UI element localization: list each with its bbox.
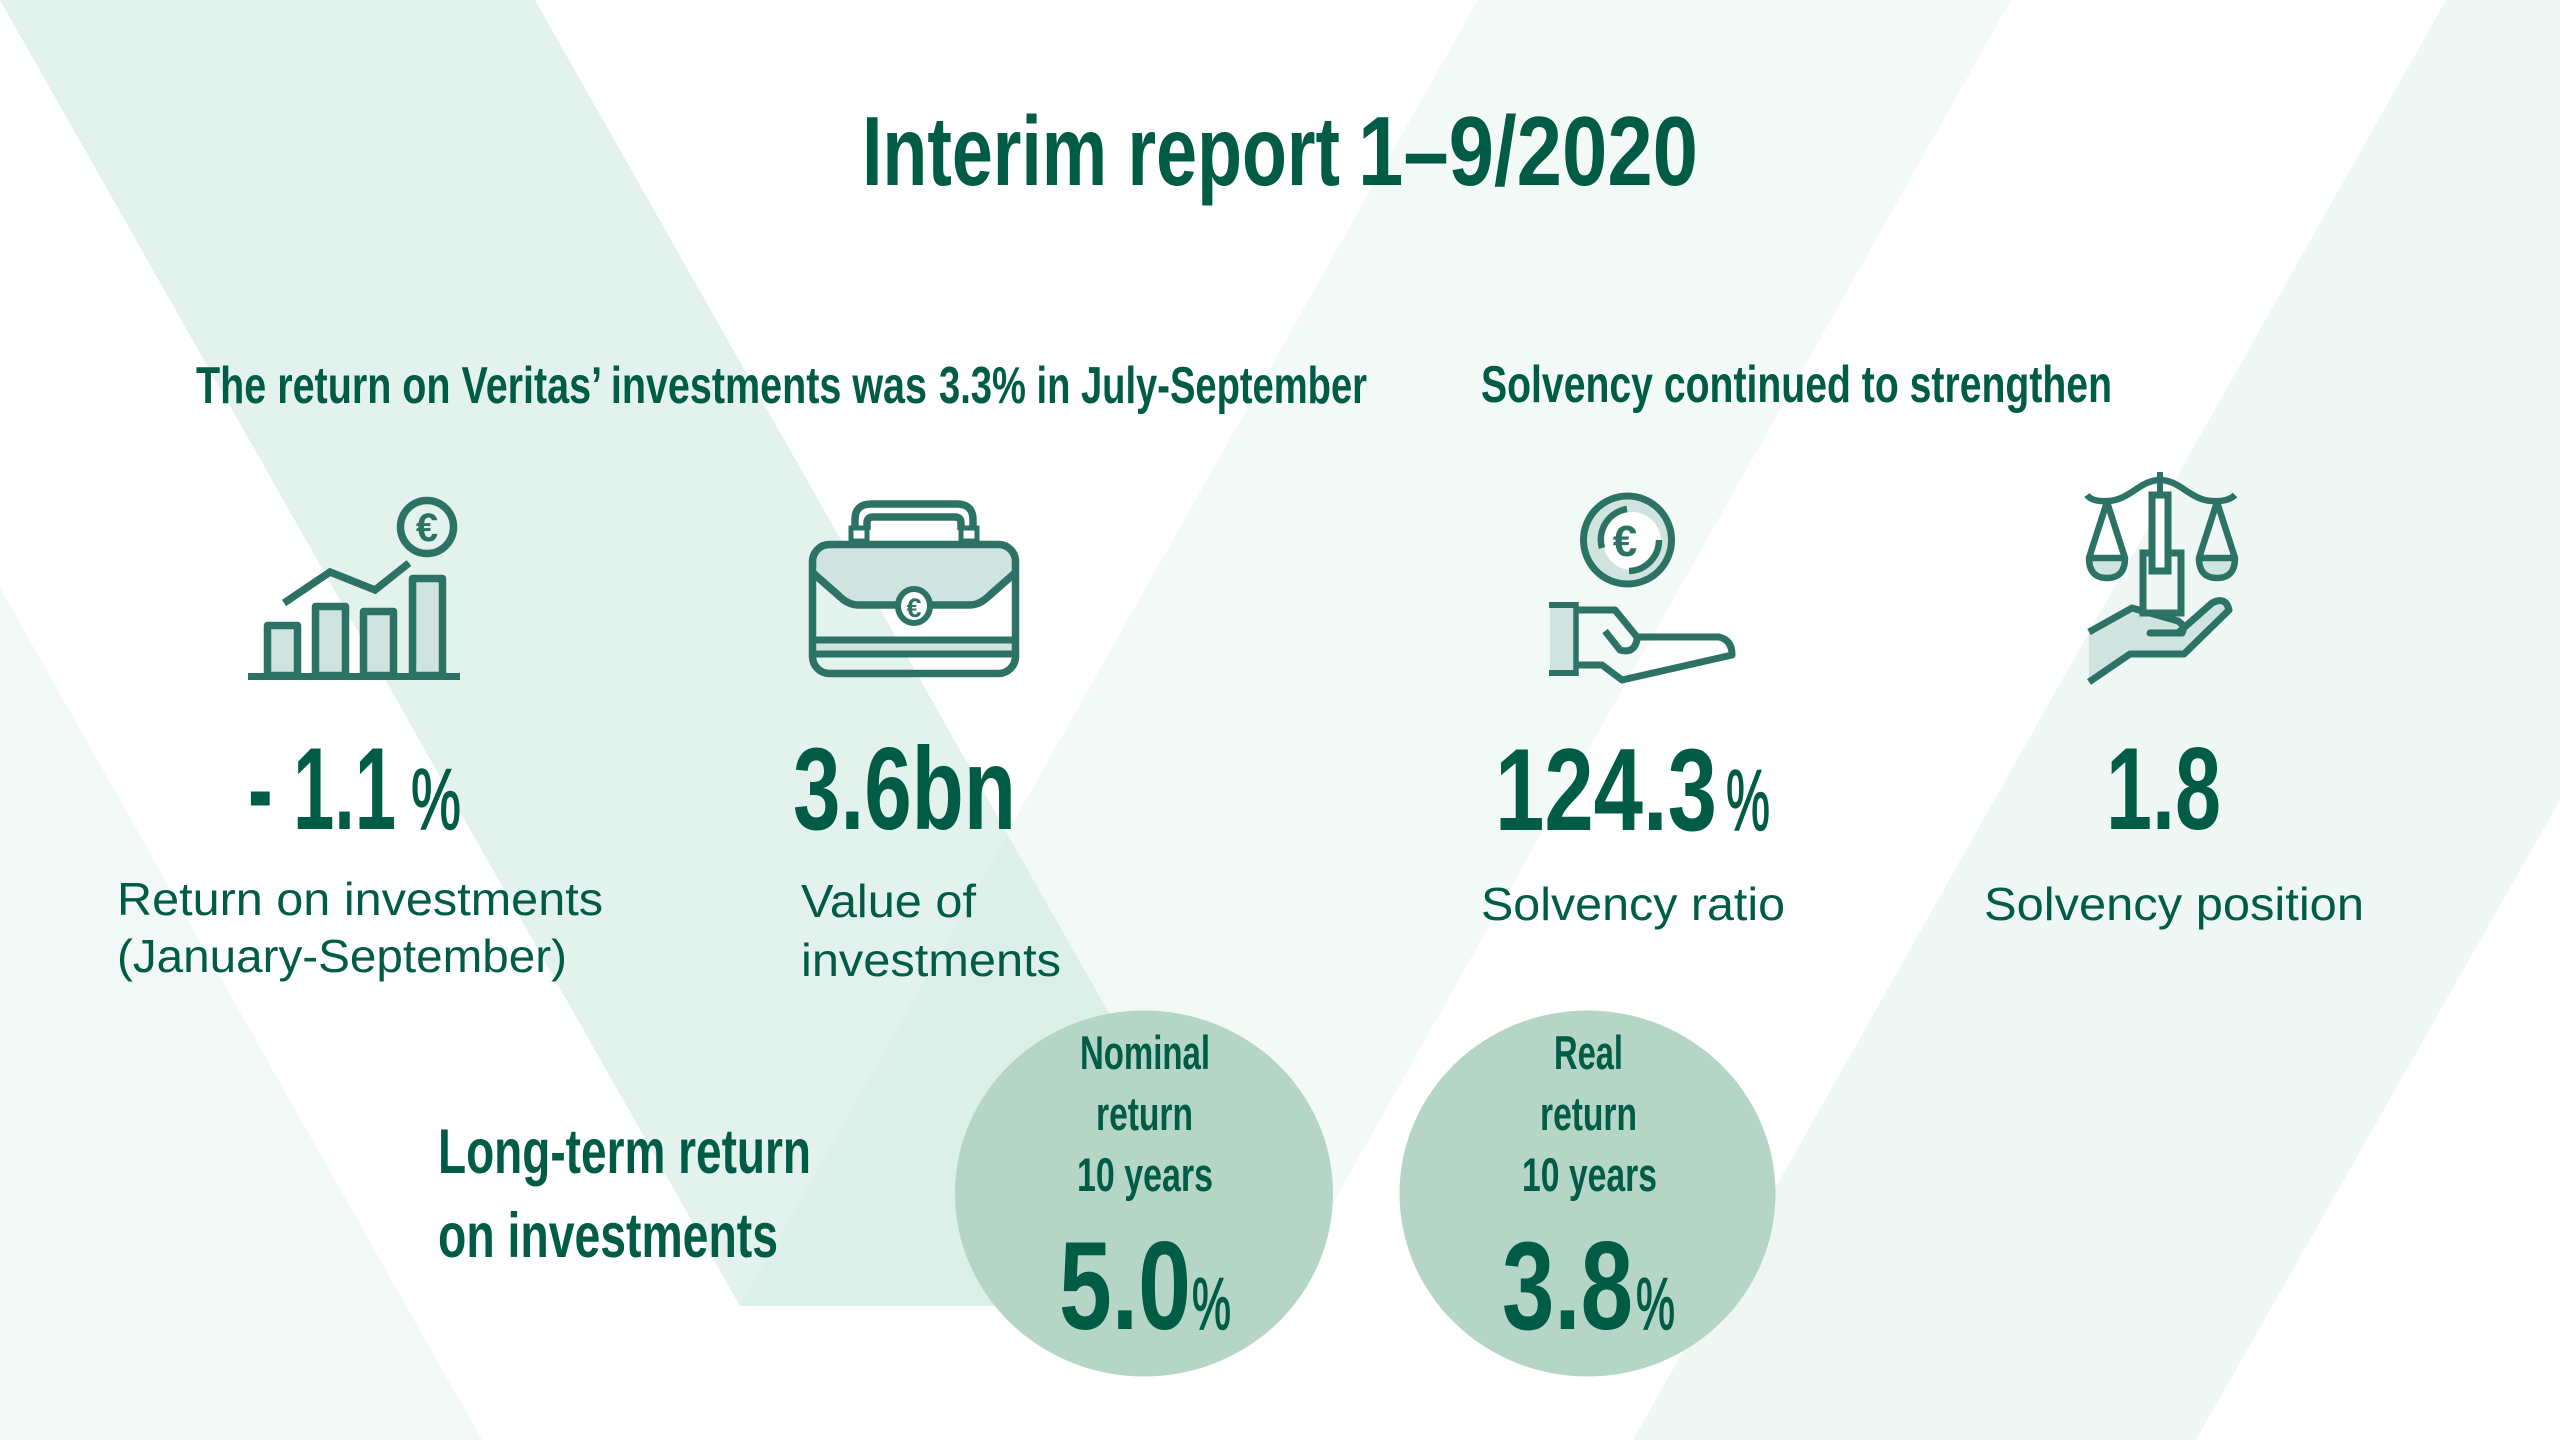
circle: nominal return: % bbox=[1192, 1264, 1231, 1345]
metric: solvency position bbox=[1984, 723, 2364, 930]
icon: hand holding scales bbox=[2087, 472, 2235, 682]
metric: solvency ratio bbox=[1481, 724, 1785, 930]
icon: briefcase: € bbox=[906, 593, 922, 623]
circle: nominal return: 10 years bbox=[1077, 1148, 1213, 1201]
circle: real return: Real bbox=[1554, 1026, 1623, 1079]
metric: return on investments: (January-September) bbox=[117, 930, 567, 982]
icon: bar chart with euro coin bbox=[248, 500, 460, 680]
long-term return heading: Long-term return bbox=[438, 1117, 811, 1187]
circle: nominal return: Nominal bbox=[1080, 1026, 1210, 1079]
circle: real return: 10 years bbox=[1522, 1148, 1657, 1201]
circle: real return: return bbox=[1540, 1087, 1637, 1140]
circle: real return: % bbox=[1636, 1264, 1675, 1345]
title: 1–9/2020 bbox=[1358, 96, 1698, 206]
title: Interim report bbox=[862, 96, 1340, 206]
icon: briefcase bbox=[812, 504, 1016, 674]
metric: return on investments: Return on investments bbox=[117, 873, 603, 925]
long-term return heading bbox=[438, 1117, 811, 1271]
metric: solvency ratio: % bbox=[1726, 753, 1770, 849]
metric: solvency position: 1.8 bbox=[2106, 723, 2221, 854]
heading: solvency: Solvency continued to strengthen bbox=[1481, 356, 2112, 414]
icon: bar chart with euro coin: € bbox=[416, 506, 438, 550]
metric: value of investments bbox=[793, 723, 1061, 986]
metric: return on investments: - 1.1 bbox=[248, 723, 396, 854]
metric: value of investments: 3.6bn bbox=[793, 723, 1016, 854]
metric: value of investments: Value of bbox=[801, 875, 976, 927]
circle: nominal return: 5.0 bbox=[1059, 1217, 1191, 1356]
metric: solvency ratio: 124.3 bbox=[1495, 724, 1717, 855]
circle: real return bbox=[1400, 1010, 1776, 1376]
metric: value of investments: investments bbox=[801, 934, 1061, 986]
heading: investment return: The return on Veritas’ investments was bbox=[196, 357, 927, 415]
icon: hand holding euro coin bbox=[1549, 496, 1732, 680]
metric: solvency ratio: Solvency ratio bbox=[1481, 878, 1785, 930]
circle: real return: 3.8 bbox=[1502, 1217, 1633, 1356]
metric: solvency position: Solvency position bbox=[1984, 878, 2364, 930]
metric: return on investments bbox=[117, 723, 603, 982]
metric: return on investments: % bbox=[411, 752, 461, 848]
icon: hand holding euro coin: € bbox=[1613, 517, 1637, 566]
long-term return heading: on investments bbox=[438, 1201, 778, 1271]
circle: nominal return: return bbox=[1096, 1087, 1193, 1140]
circle: nominal return bbox=[955, 1010, 1333, 1376]
heading: investment return: 3.3% in July-September bbox=[939, 357, 1367, 415]
